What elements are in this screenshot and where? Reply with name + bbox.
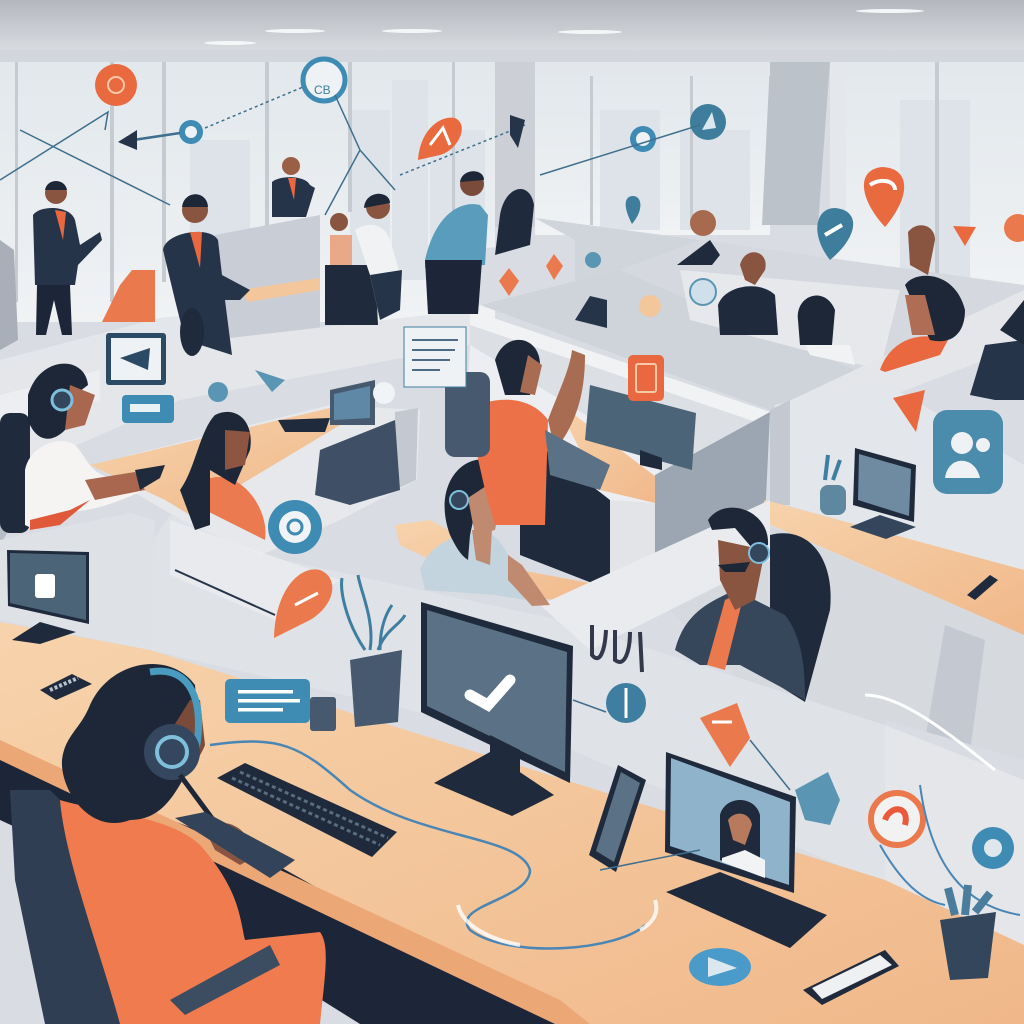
main monitor: [421, 602, 573, 816]
neck/face: [160, 700, 205, 772]
floating icons upper: CB: [314, 83, 331, 97]
wall notes and icons mid left: [106, 327, 466, 554]
headset: [150, 671, 199, 750]
windows: [0, 62, 1024, 350]
back businessman: [272, 157, 315, 217]
right wall icons and monitor: [820, 390, 1003, 600]
agent in orange top: [180, 412, 266, 540]
agent seated middle with beard: [675, 508, 831, 702]
agent seated centre woman: [420, 459, 550, 606]
centre cubicle monitor: [585, 385, 696, 470]
phone tablet: [589, 765, 646, 872]
mid left cubicle walls: [0, 310, 770, 560]
standing man in blue shirt: [425, 171, 534, 314]
left headset agent in white: [0, 364, 165, 533]
back group seated: [325, 194, 405, 325]
right cubicles: [660, 290, 1024, 790]
person: front agent with headset: [10, 664, 326, 1024]
floating icons upper: [95, 59, 1024, 322]
back left monitor and chair: [278, 380, 400, 505]
front desk: [0, 622, 1024, 1024]
hair: [62, 664, 200, 823]
left monitor: [7, 550, 89, 644]
back row cubicles: [0, 215, 1024, 410]
blue cable: [210, 741, 656, 949]
right front icons: [606, 683, 1020, 915]
small cup: [310, 697, 336, 731]
orange tag: [628, 355, 664, 401]
chat bubble: [225, 679, 310, 723]
standing businessman left: [33, 181, 102, 335]
connector lines with arrows: [0, 87, 790, 870]
video monitor: [665, 752, 827, 948]
plant pot with stems: [342, 575, 405, 727]
chair: [10, 790, 170, 1024]
back right agents: [677, 210, 1024, 400]
orange pin: [274, 569, 332, 638]
body: [60, 800, 326, 1024]
agent standing in orange tank: [445, 340, 610, 525]
middle centre cubicle: [395, 345, 770, 612]
front partition wall: [0, 500, 1024, 960]
hand: [205, 823, 258, 865]
keyboard and phone on front desk: [40, 674, 397, 878]
wall scribble: [592, 625, 642, 672]
front right pot, keyboard, play button: [689, 885, 996, 1005]
standing businessman second: [163, 194, 250, 356]
chair arm: [170, 945, 280, 1015]
